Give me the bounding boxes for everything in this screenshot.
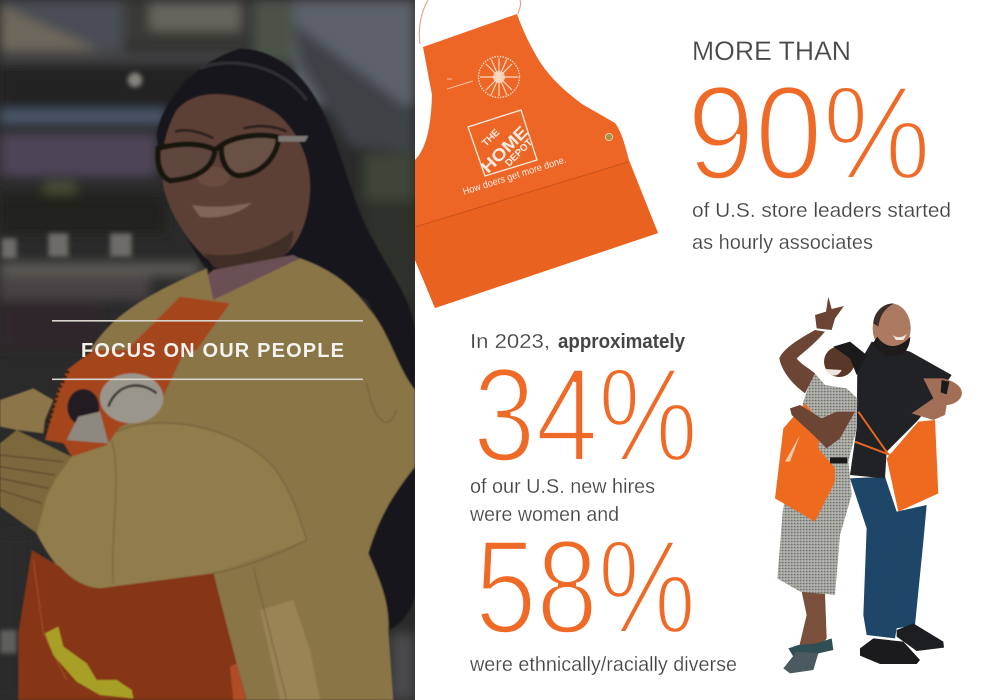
stat heading: more than: MORE THAN — [692, 36, 851, 66]
icon: orange apron — [415, 0, 658, 308]
person — [0, 48, 415, 700]
apron logo: THE — [480, 127, 502, 149]
text: new hires caption: were women and — [469, 504, 619, 526]
text: new hires caption — [469, 476, 655, 526]
hair — [157, 48, 415, 393]
leaves in pocket — [45, 627, 133, 698]
text: store leaders caption: as hourly associates — [692, 232, 873, 254]
woman — [775, 297, 867, 673]
stat: 58%: 58% — [475, 513, 696, 662]
man — [850, 303, 962, 664]
photo background: blurred garden shelves — [0, 0, 415, 700]
panel: photo of associate — [0, 0, 415, 700]
apron badge emblem — [478, 56, 520, 98]
text: in 2023 approximately — [470, 331, 686, 353]
stat: 34%: 34% — [473, 341, 698, 490]
apron logo: HOME — [477, 122, 532, 177]
knit cuffs — [0, 388, 72, 533]
text: store leaders caption: of U.S. store leaders started — [692, 200, 951, 222]
apron strap and bib with pins — [45, 297, 230, 457]
scarf — [208, 254, 300, 300]
cardigan — [90, 258, 415, 700]
smile — [192, 203, 252, 218]
text: new hires caption: of our U.S. new hires — [470, 476, 655, 498]
text: in 2023 approximately: In 2023, — [470, 331, 550, 353]
cardigan folds — [110, 383, 397, 700]
heading band: focus on our people: FOCUS ON OUR PEOPLE — [81, 340, 344, 362]
text: store leaders caption — [692, 200, 951, 254]
apron logo: DEPOT — [503, 137, 535, 169]
apron lower — [18, 550, 247, 700]
photo: two associates back to back — [775, 297, 962, 673]
glasses — [158, 135, 278, 181]
text: in 2023 approximately: approximately — [558, 331, 686, 353]
text: diverse caption: were ethnically/racially diverse — [469, 654, 737, 676]
stat: 90%: 90% — [687, 59, 931, 208]
face and neck — [162, 94, 310, 267]
apron tagline: How doers get more done. — [462, 155, 568, 198]
apron logo — [468, 110, 537, 177]
